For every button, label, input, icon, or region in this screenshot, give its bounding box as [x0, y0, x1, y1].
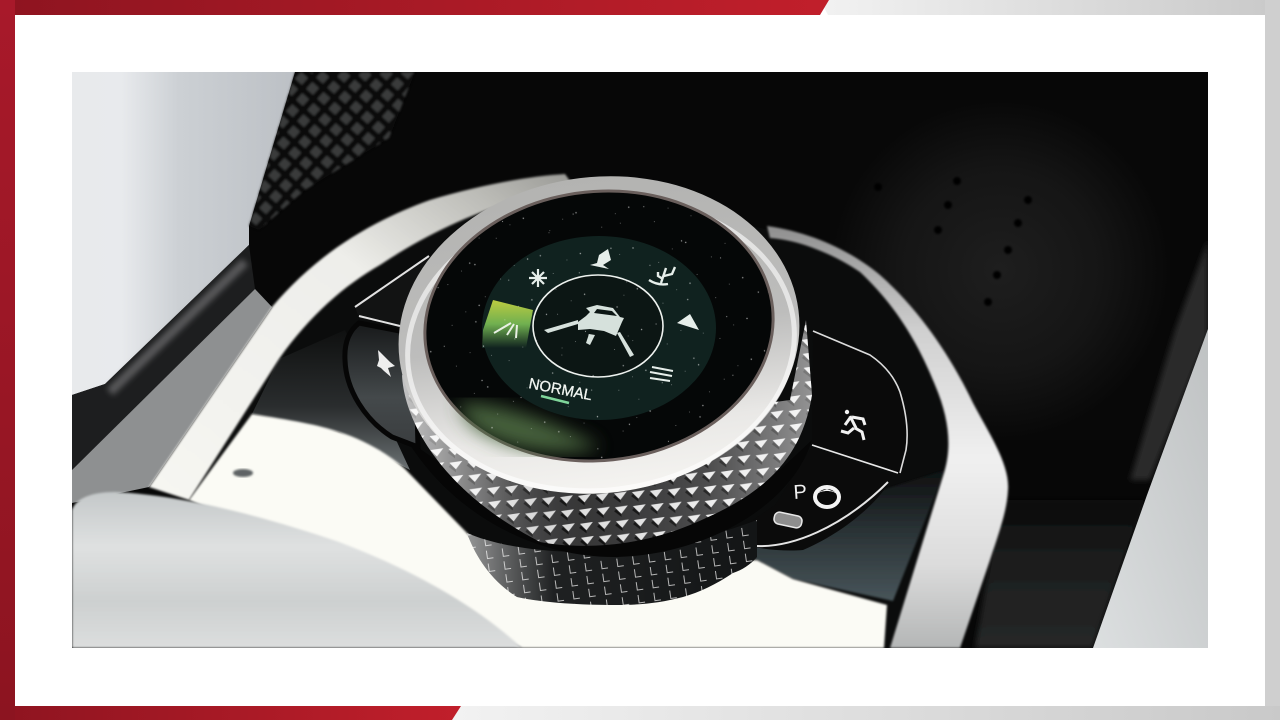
photo: rotary drive mode selector in car console — [72, 72, 1208, 648]
icon: rocket — [377, 350, 395, 377]
lower textured floor strip — [974, 524, 1132, 648]
icon: switch — [773, 511, 803, 529]
left chrome trim — [149, 174, 575, 500]
floor perforations — [874, 177, 1032, 306]
frame: bottom red bar — [0, 706, 461, 720]
lower-left grey armrest — [72, 492, 522, 648]
frame: right grey bar — [1265, 0, 1280, 720]
frame: top grey bar — [820, 0, 1280, 15]
frame: bottom grey bar — [452, 706, 1280, 720]
chrome surface dark — [900, 322, 905, 328]
icon: custom sliders — [650, 367, 673, 381]
label: P: P — [793, 481, 808, 504]
lower-left dark rubber groove — [72, 245, 255, 470]
icon: sand — [590, 249, 611, 269]
icon: mountain — [677, 314, 699, 330]
carbon weave strip — [249, 72, 415, 230]
right console buttons — [757, 330, 908, 550]
knurl reflection on chrome — [467, 520, 757, 605]
park button — [757, 481, 889, 550]
console dark floor — [72, 72, 1208, 648]
far right grey panel — [1093, 329, 1208, 648]
dial metal ring — [398, 176, 800, 494]
lower-left textured grey — [72, 289, 272, 503]
left console buttons — [345, 256, 429, 447]
speckles on glass — [430, 206, 768, 458]
display disc — [482, 236, 716, 420]
blurred wall strip — [1130, 240, 1208, 480]
icon: car with road lines — [544, 305, 634, 357]
frame: left red bar — [0, 0, 15, 720]
upper-left grey interior panel — [72, 72, 295, 395]
runner button — [812, 331, 908, 473]
label: NORMAL: NORMAL — [527, 375, 593, 404]
green reflection — [457, 403, 600, 452]
black band under dial — [565, 532, 722, 557]
icon: normal mode road lines — [494, 323, 517, 338]
icon: cactus — [649, 267, 675, 284]
selected mode underline — [541, 396, 569, 403]
icon: snowflake — [529, 269, 547, 287]
icon: parking brake — [813, 485, 841, 509]
chrome white reflection — [189, 414, 887, 648]
groove highlight — [110, 262, 245, 392]
blemish on chrome — [233, 469, 253, 477]
active mode wedge — [482, 300, 533, 348]
chrome lower right reflection — [755, 472, 943, 602]
knurled dial base — [402, 320, 812, 546]
frame: top red bar — [0, 0, 829, 15]
right chrome trim — [767, 226, 1008, 648]
chrome left reflection — [252, 330, 410, 470]
icon: runner — [841, 410, 865, 440]
dial glass screen — [426, 192, 772, 460]
